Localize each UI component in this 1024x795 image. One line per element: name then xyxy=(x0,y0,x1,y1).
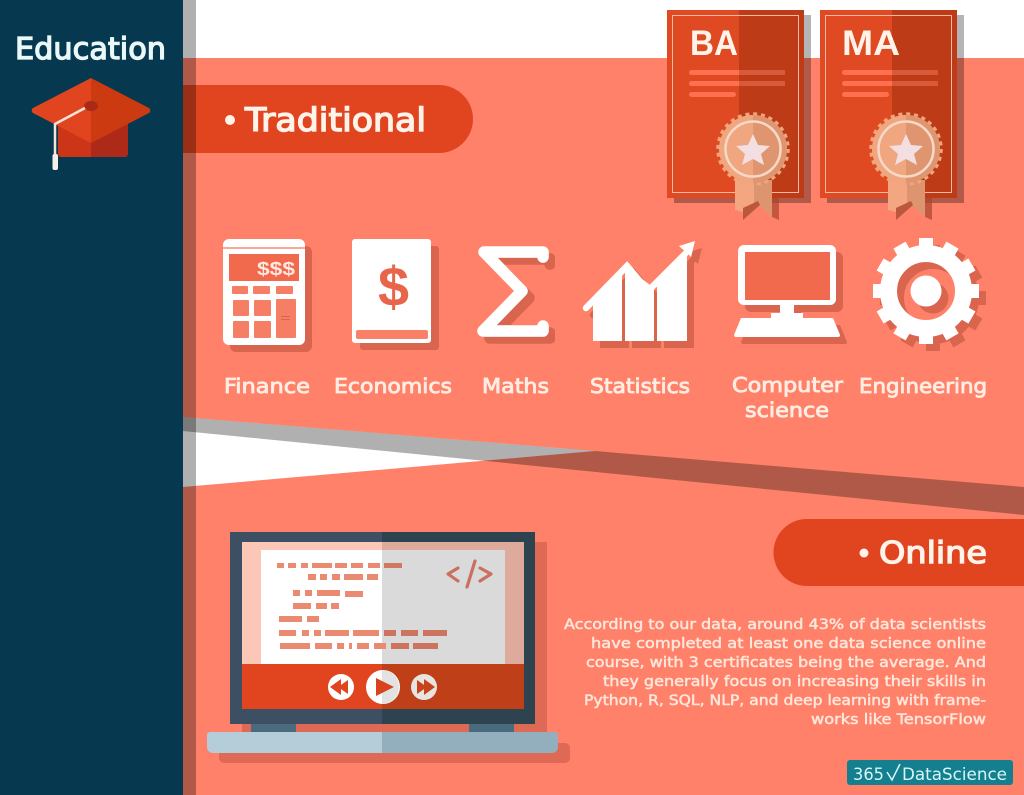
text block: online summary: works like TensorFlow xyxy=(811,712,986,728)
pill: online: Online xyxy=(879,536,987,571)
text block: online summary xyxy=(564,617,986,728)
label: Computer science xyxy=(732,373,844,422)
certificate: MA: MA xyxy=(842,24,900,63)
pill: traditional: Traditional xyxy=(244,101,426,139)
icon: laptop xyxy=(207,532,570,763)
diagonal shadow band xyxy=(183,417,1024,515)
certificate: MA xyxy=(820,10,964,220)
logo: 365 DataScience: 365 xyxy=(853,765,884,785)
certificate: BA xyxy=(667,10,811,220)
code lines xyxy=(277,563,447,649)
icon: book xyxy=(352,239,439,350)
subject labels xyxy=(224,373,987,422)
icon: sigma xyxy=(483,252,543,331)
icon: seal ribbon xyxy=(735,180,779,220)
label: Engineering: Engineering xyxy=(859,374,987,398)
vertical shadow strip xyxy=(183,0,196,795)
certificate: BA: BA xyxy=(690,24,738,63)
pill: online xyxy=(774,519,1024,586)
icon: code brackets xyxy=(448,561,491,587)
icon: book: $ xyxy=(378,255,409,318)
panel: sidebar xyxy=(0,0,183,795)
logo: 365 DataScience xyxy=(847,760,1013,785)
player bar xyxy=(242,664,524,709)
icon: calculator: $$$ xyxy=(257,258,296,279)
icon: calculator xyxy=(223,239,305,345)
heading: Education: Education xyxy=(15,32,166,67)
text block: online summary: have completed at least one data science online xyxy=(591,636,986,652)
icon: seal ribbon xyxy=(888,180,932,220)
label: Economics: Economics xyxy=(334,374,452,398)
text block: online summary: course, with 3 certificates being the average. And xyxy=(586,655,986,671)
label: Computer science: Computer xyxy=(732,373,844,397)
label: Maths: Maths xyxy=(482,374,549,398)
logo: 365 DataScience: DataScience xyxy=(902,765,1007,785)
icon: gear xyxy=(873,238,979,344)
icon: growth chart xyxy=(586,241,695,341)
label: Finance: Finance xyxy=(224,374,310,398)
text block: online summary: they generally focus on increasing their skills in xyxy=(603,674,986,690)
icon: seal xyxy=(871,114,941,184)
label: Statistics: Statistics xyxy=(590,374,690,398)
pill: traditional xyxy=(183,85,473,153)
text block: online summary: Python, R, SQL, NLP, and deep learning with frame- xyxy=(584,693,986,709)
icon: computer xyxy=(734,245,840,337)
text block: online summary: According to our data, around 43% of data scientists xyxy=(564,617,986,633)
icon: graduation cap xyxy=(32,78,150,170)
label: Computer science: science xyxy=(745,398,829,422)
icon: seal xyxy=(718,114,788,184)
